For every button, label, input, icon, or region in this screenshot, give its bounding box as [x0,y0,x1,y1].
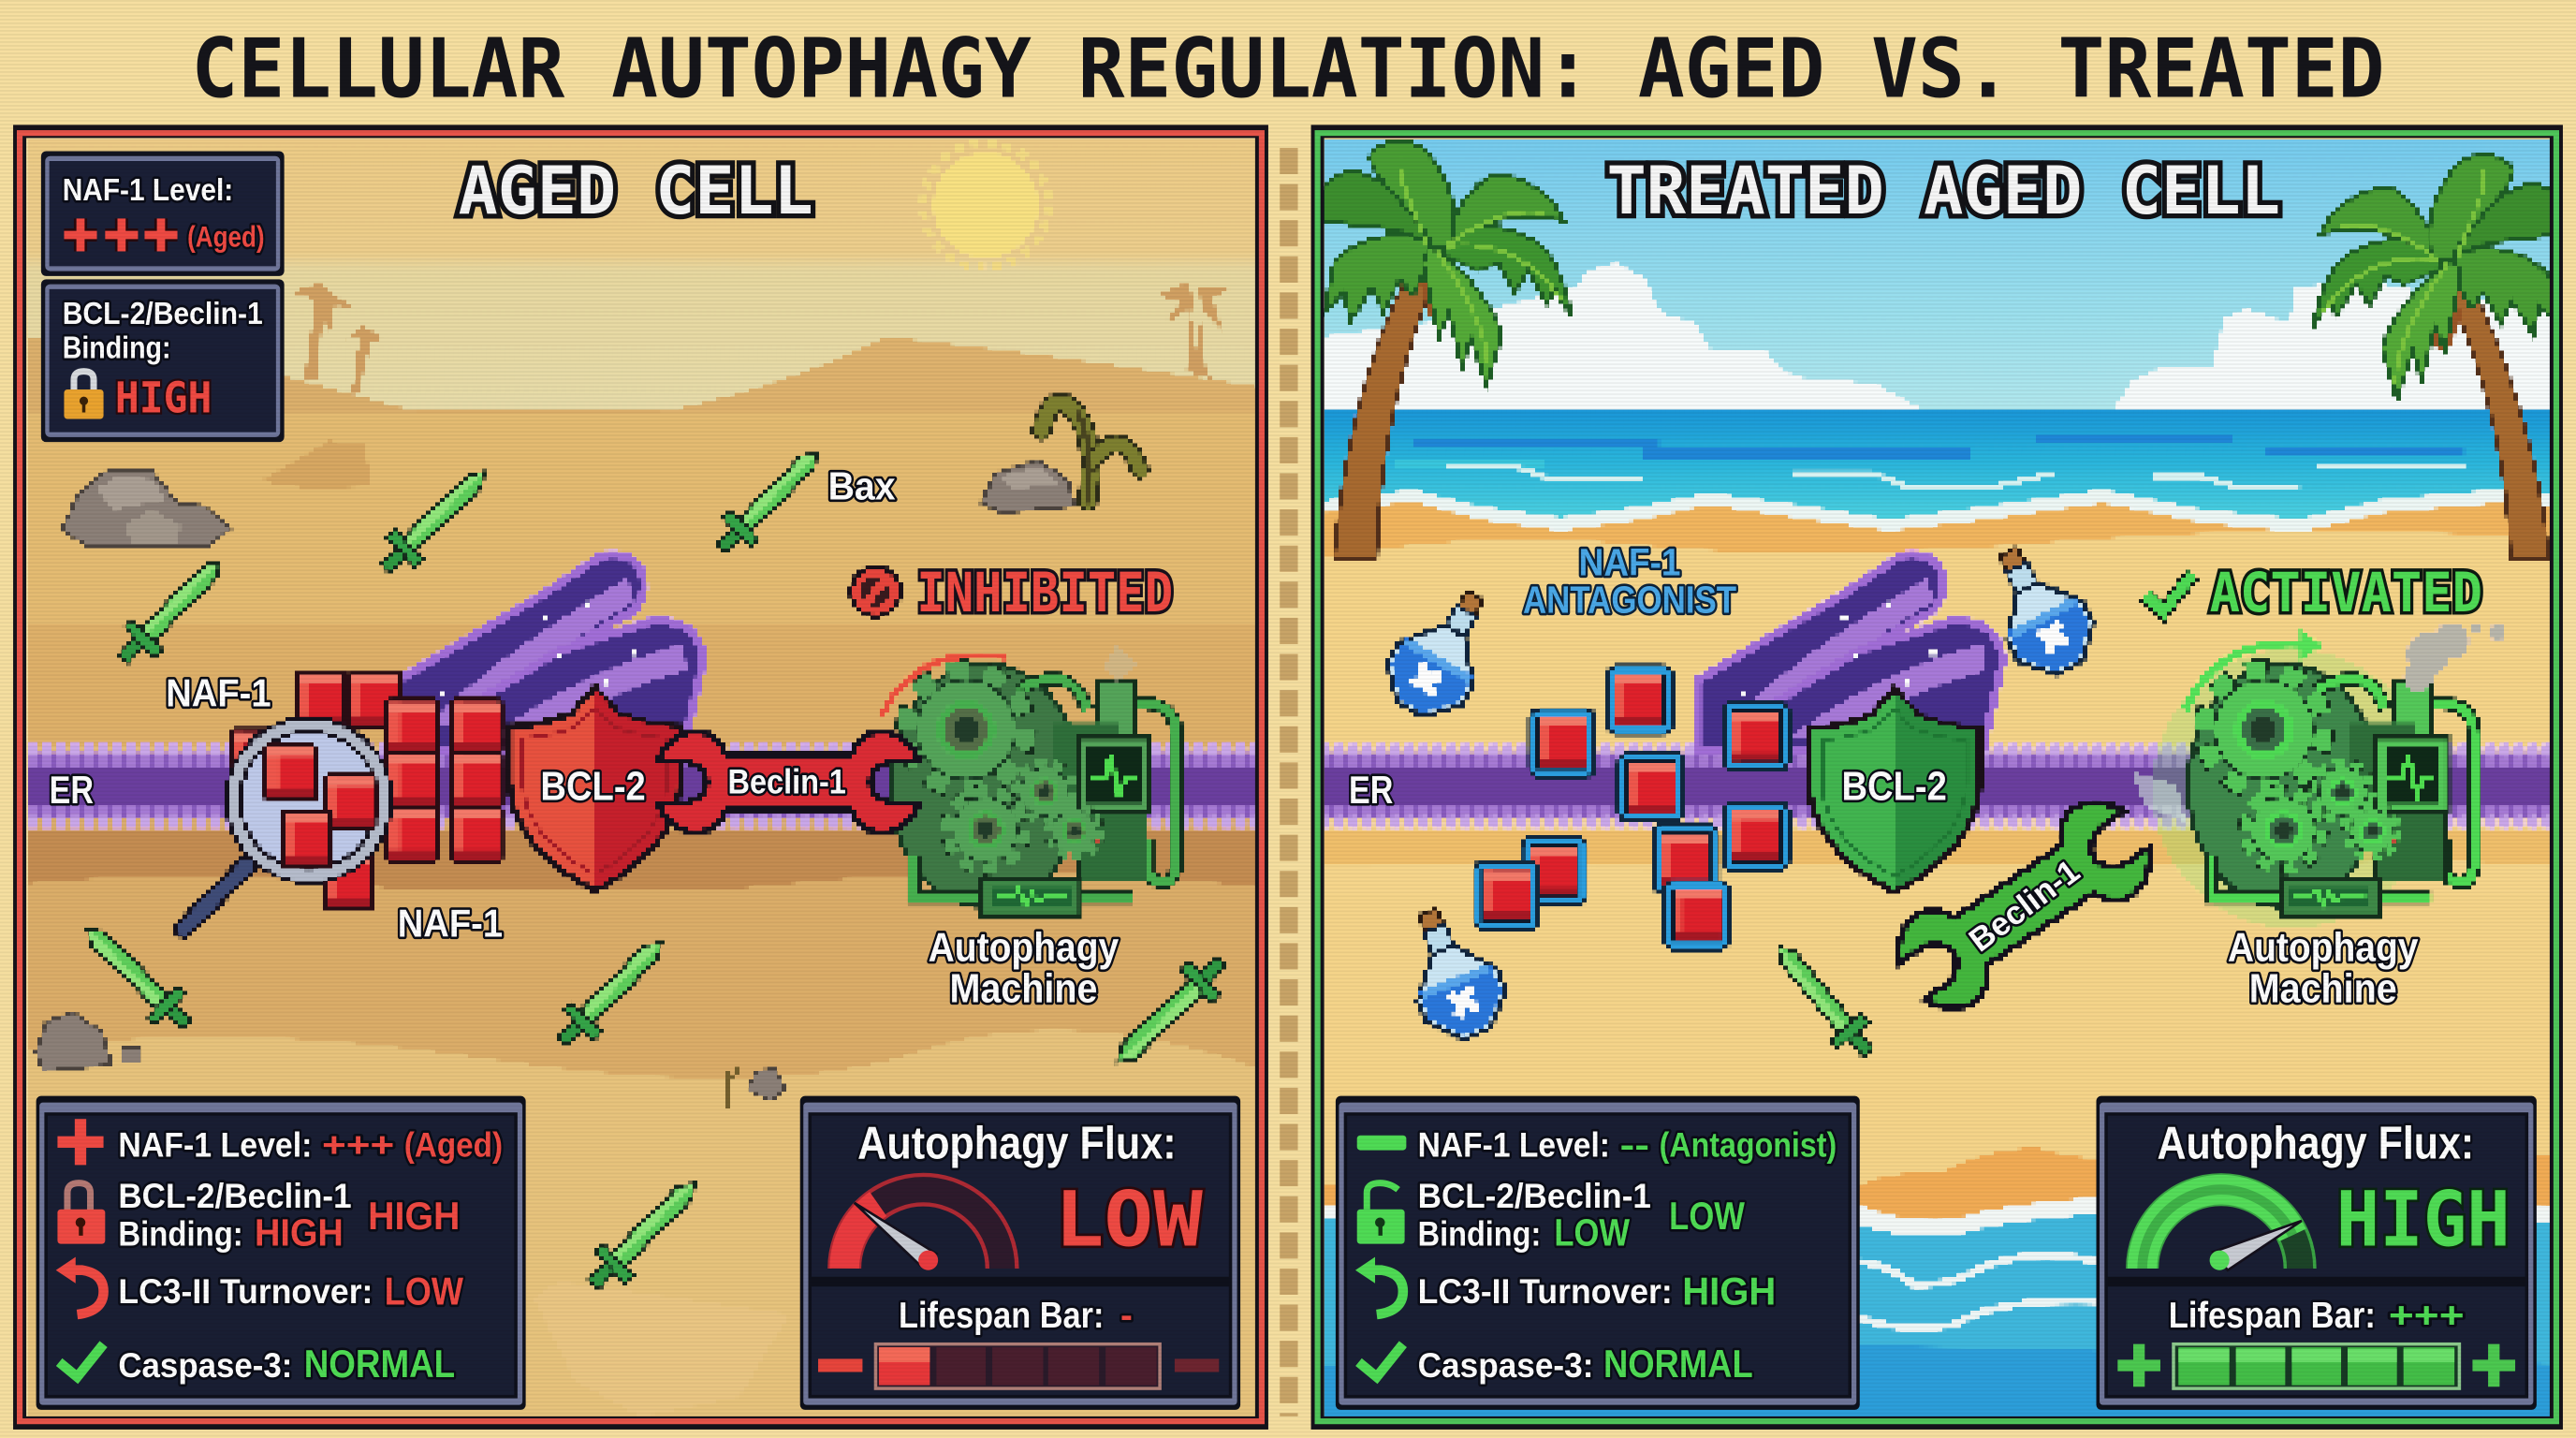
beach sky [1323,141,2552,414]
BCL-2 label: BCL-2 [1841,764,1947,810]
row: NAF-1 level: -- [1620,1126,1649,1165]
aged cell scene artwork [26,141,1257,1416]
clouds [1323,263,2552,414]
lifespan bar high [2117,1344,2515,1388]
lifespan heading: - [1120,1296,1133,1336]
flux heading: Autophagy Flux: [857,1118,1177,1168]
Beclin-1 wrench [657,731,920,833]
small rock and twig [726,1068,785,1108]
shoreline [1323,1147,2552,1416]
row: NAF-1 level: NAF-1 Level: [1418,1126,1610,1165]
machine label [929,925,1120,1012]
panel: aged cell [20,131,1262,1423]
autophagy machine [890,664,1177,916]
panel: status list aged [37,1096,526,1410]
sand dunes [26,337,1257,1416]
row: caspase-3 [59,1342,455,1386]
lifespan heading: +++ [2389,1296,2465,1336]
BCL-2 shield [1808,688,1980,892]
sea [1323,411,2552,518]
autophagy machine active [2188,664,2474,916]
machine label: Machine [949,966,1097,1012]
callout: binding high [41,279,285,442]
flux heading: Autophagy Flux: [2157,1118,2474,1168]
antagonist label [1523,540,1736,622]
callout: binding high: BCL-2/Beclin-1 [63,297,263,331]
machine label [2228,925,2419,1012]
row: caspase-3 [1358,1342,1753,1386]
steam [2404,623,2506,692]
Beclin-1 wrench [1882,786,2166,1024]
Beclin-1 label: Beclin-1 [728,763,846,801]
ER label: ER [1349,768,1393,812]
row: NAF-1 level [57,1119,503,1165]
magnifier [184,725,385,929]
Bax label: Bax [828,464,896,508]
ER membrane [26,742,1257,829]
rock lower left [37,1012,141,1071]
NAF-1 labels [166,671,503,945]
row: NAF-1 level: (Aged) [404,1126,503,1165]
panel heading: aged cell: AGED CELL [459,153,813,229]
Beclin-1 label: Beclin-1 [1963,853,2086,959]
right palm tree [2313,155,2559,559]
row: binding: BCL-2/Beclin-1 [118,1177,352,1215]
panel heading: treated aged cell: TREATED AGED CELL [1606,153,2280,229]
ER label: ER [50,768,94,812]
row: LC3-II: HIGH [1682,1269,1776,1313]
ER membrane [1323,742,2552,829]
inhibited icon [851,567,900,616]
row: binding: LOW [1669,1194,1745,1238]
sun [923,143,1048,268]
title: CELLULAR AUTOPHAGY REGULATION: AGED VS. TREATED [191,22,2385,117]
panel frame [1318,131,2556,1423]
row: NAF-1 level [1357,1126,1837,1165]
sand [1323,490,2552,1416]
row: binding: BCL-2/Beclin-1 [1418,1177,1651,1215]
lifespan heading: Lifespan Bar: [2169,1296,2376,1336]
row: binding: HIGH [368,1194,460,1238]
panel: flux and lifespan aged [800,1096,1240,1410]
row: NAF-1 level: +++ [322,1126,394,1165]
stalled rotation arc [882,655,1005,716]
rotation arrow [2185,627,2323,710]
swords [73,438,1237,1300]
ER folds [398,554,703,749]
row: caspase-3: NORMAL [1603,1342,1753,1386]
NAF-1 labels: NAF-1 [166,671,271,715]
freed sword [1763,933,1884,1066]
callout: NAF-1 level: (Aged) [187,219,265,253]
left palm tree [1325,142,1571,559]
machine label: Autophagy [2228,925,2419,971]
NAF-1 labels: NAF-1 [398,901,503,945]
row: binding: HIGH [255,1211,344,1254]
centre divider [1283,148,1294,1416]
flux value high: HIGH [2336,1176,2510,1264]
row: LC3-II: LC3-II Turnover: [1418,1272,1673,1311]
distant palm silhouette right [1157,283,1229,381]
antagonist label: NAF-1 [1579,540,1680,583]
activated check icon [2145,574,2193,611]
machine label: Machine [2249,966,2397,1012]
activated status: ACTIVATED [2210,561,2482,624]
callout: NAF-1 level: NAF-1 Level: [63,173,233,208]
row: LC3-II: LOW [385,1269,463,1313]
BCL-2 label: BCL-2 [540,764,646,810]
antagonist flasks [1372,532,2107,1049]
treated cell scene artwork [1323,141,2559,1416]
machine glow [2152,649,2432,929]
antagonist label: ANTAGONIST [1523,579,1736,622]
callout: binding high: HIGH [115,374,212,423]
row: caspase-3: Caspase-3: [118,1346,292,1385]
panel: status list treated [1336,1096,1860,1410]
ER folds [1697,554,2002,749]
wilted plant [1042,403,1140,501]
row: binding [57,1177,460,1254]
rock near plant [981,460,1075,513]
callout: NAF-1 level [41,151,285,276]
desert sky [26,141,1257,420]
gauge low [829,1175,1017,1270]
row: binding [1357,1177,1745,1254]
panel: treated aged cell [1318,131,2559,1423]
flux value low: LOW [1055,1176,1203,1264]
row: binding: LOW [1554,1211,1631,1254]
row: LC3-II [56,1257,463,1314]
row: binding: Binding: [118,1214,243,1253]
rock upper left [63,470,230,546]
callout: binding high: Binding: [63,331,171,366]
inhibited status: INHIBITED [916,561,1173,624]
panel: flux and lifespan treated [2097,1096,2537,1410]
faint steam [1104,644,1137,682]
freed NAF-1 cubes [1472,664,1791,951]
row: caspase-3: NORMAL [304,1342,455,1386]
row: NAF-1 level: NAF-1 Level: [118,1126,312,1165]
energy sparkle [2132,772,2185,822]
row: LC3-II [1355,1257,1776,1314]
row: NAF-1 level: (Antagonist) [1660,1126,1837,1165]
row: binding: Binding: [1418,1214,1541,1253]
BCL-2 shield [509,687,681,890]
panel frame [20,131,1262,1423]
lifespan heading: Lifespan Bar: [899,1296,1104,1336]
row: caspase-3: Caspase-3: [1418,1346,1593,1385]
machine label: Autophagy [929,925,1120,971]
row: LC3-II: LC3-II Turnover: [118,1272,373,1311]
gauge high [2128,1175,2315,1270]
distant palm silhouettes left [289,283,386,394]
lifespan bar low [818,1344,1219,1388]
NAF-1 cubes [231,672,501,909]
